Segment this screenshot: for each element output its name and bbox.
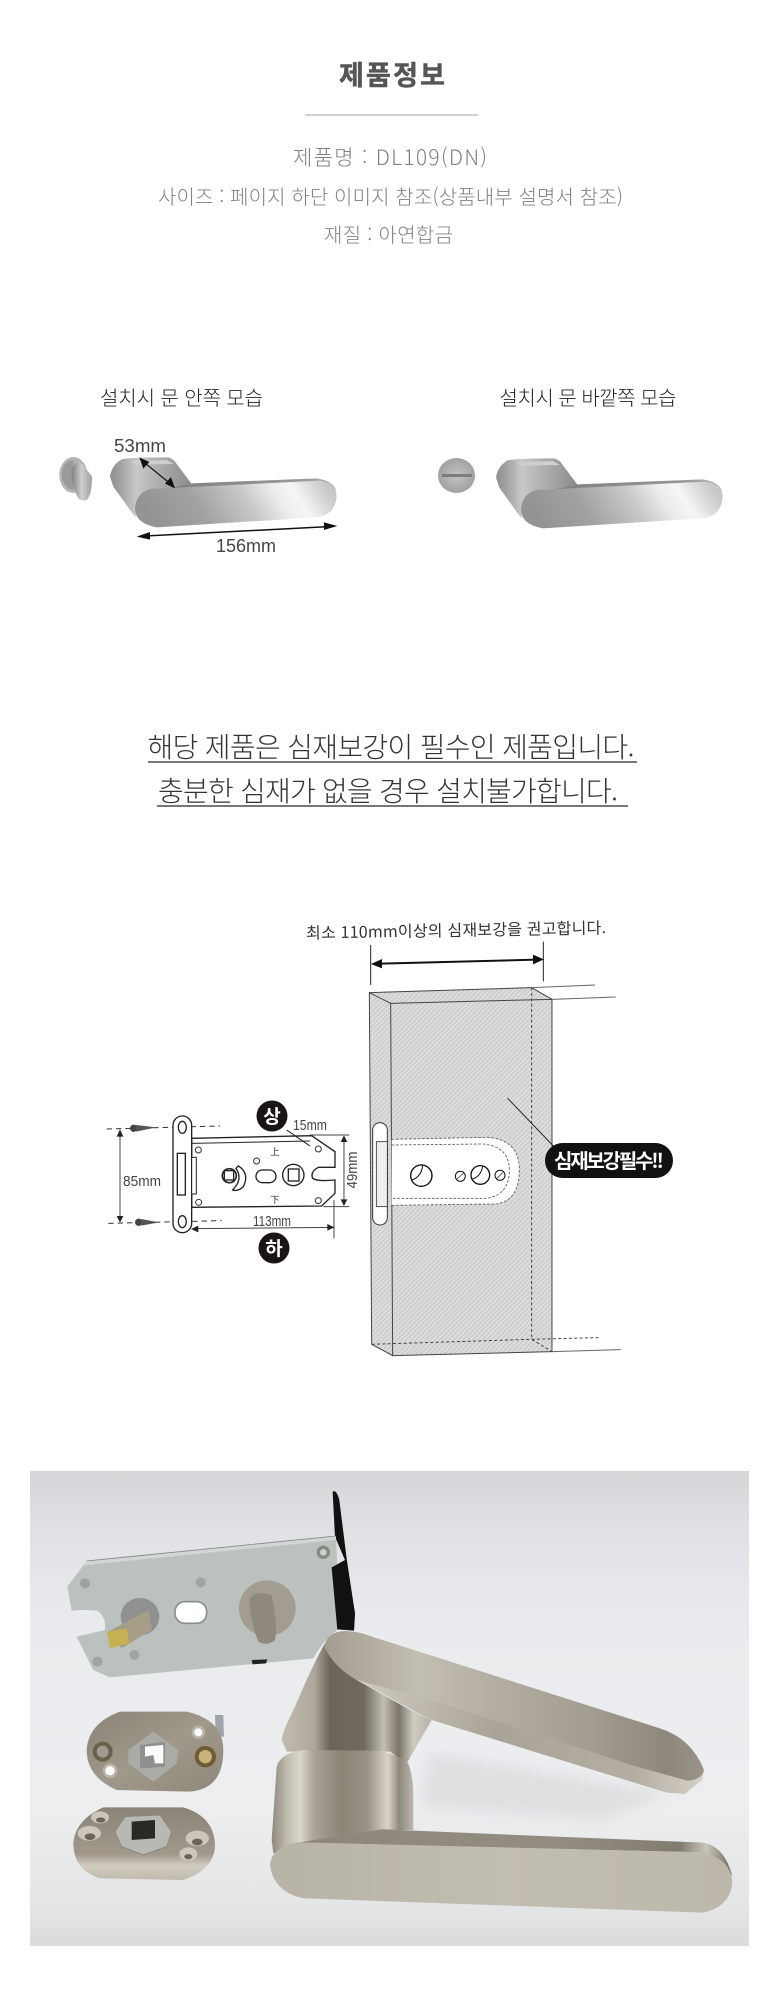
- icon: outside emergency release: [438, 458, 475, 493]
- label: inside view: 설치시 문 안쪽 모습: [100, 382, 263, 411]
- lock labels: 49mm: [345, 1152, 361, 1188]
- icon: outside door lever: [496, 458, 723, 528]
- photo: levers: [270, 1631, 732, 1913]
- lock body: [192, 1136, 335, 1207]
- arrow: 156mm dimension: [137, 522, 337, 540]
- photo background: [30, 1471, 749, 1946]
- mortise lock drawing: [107, 1116, 349, 1238]
- photo: lower lever: [270, 1750, 732, 1913]
- lock labels: 15mm: [293, 1118, 327, 1134]
- lock labels: 113mm: [253, 1214, 291, 1230]
- faceplate: [173, 1116, 196, 1233]
- lock labels: 下: [270, 1193, 280, 1206]
- photo: rosette with hub: [73, 1807, 215, 1880]
- door block: [369, 985, 621, 1356]
- dimensions: [120, 1130, 349, 1238]
- label: 156mm: 156mm: [216, 536, 276, 556]
- mortise cut-out: [392, 1137, 519, 1205]
- note: minimum reinforcement: 최소 110mm이상의 심재보강을 권고합니다.: [306, 914, 606, 944]
- photo: mortise lock: [67, 1491, 355, 1677]
- photo: rosette with screws: [87, 1712, 224, 1792]
- icon: inside thumb turn: [59, 457, 92, 501]
- text block: product info: 제품명 : DL109(DN): [293, 142, 487, 172]
- badge: top: 상: [263, 1102, 281, 1129]
- title: 제품정보: [339, 54, 445, 93]
- callout: core reinforcement required: 심재보강필수!!: [554, 1145, 664, 1174]
- door reinforcement diagram: [369, 942, 621, 1356]
- arrow: 110mm span: [371, 942, 544, 985]
- product photo: [30, 1471, 749, 1946]
- arrow: 53mm dimension: [139, 457, 175, 488]
- badge: bottom: [258, 1232, 290, 1264]
- latch slot: [373, 1123, 387, 1225]
- text block: product info: [158, 142, 623, 248]
- text block: product info: 사이즈 : 페이지 하단 이미지 참조(상품내부 설명서 참조): [158, 181, 623, 210]
- title divider: [305, 114, 478, 116]
- warning text: 해당 제품은 심재보강이 필수인 제품입니다.: [148, 726, 634, 766]
- text block: product info: 재질 : 아연합금: [324, 219, 453, 248]
- arrowheads: [117, 1129, 347, 1232]
- photo: rosettes: [73, 1712, 224, 1880]
- label: outside view: 설치시 문 바깥쪽 모습: [500, 382, 676, 411]
- dashed guides: [107, 1126, 222, 1223]
- photo: lever shadow: [420, 1753, 670, 1820]
- lock labels: 85mm: [123, 1174, 161, 1190]
- warning text: [148, 726, 637, 810]
- lock labels: [123, 1118, 361, 1230]
- warning text: 충분한 심재가 없을 경우 설치불가합니다.: [158, 770, 618, 810]
- label: 53mm: 53mm: [114, 436, 166, 456]
- leader line: [508, 1098, 553, 1146]
- lock labels: 上: [270, 1145, 280, 1158]
- icon: inside door lever: [110, 457, 337, 527]
- badge: bottom: 하: [265, 1234, 283, 1261]
- badge: top: [256, 1100, 288, 1132]
- photo: raised lever: [282, 1631, 704, 1794]
- icon: screws: [130, 1125, 159, 1226]
